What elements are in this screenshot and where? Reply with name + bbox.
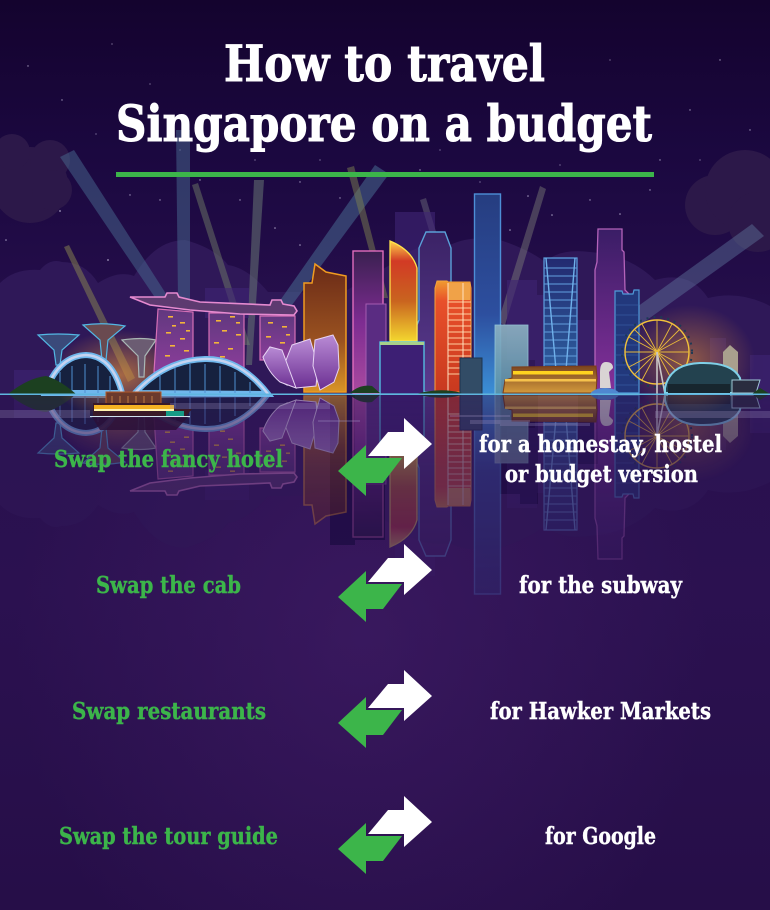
title: Singapore on a budget — [116, 94, 652, 153]
small far tower — [723, 345, 738, 394]
reflected clouds — [0, 394, 770, 550]
title: How to travel — [224, 34, 545, 93]
row 1: hotel swap — [54, 418, 722, 496]
base block — [380, 342, 424, 394]
searchlight beams — [60, 130, 764, 382]
arrows: cab — [338, 544, 432, 622]
swap from: cab: Swap the cab — [96, 572, 241, 599]
glows — [50, 330, 190, 420]
merlion — [590, 362, 620, 394]
shrubs — [350, 386, 770, 394]
gardens domes — [45, 355, 268, 394]
swap from: hotel: Swap the fancy hotel — [54, 446, 283, 473]
hatched blue tower — [544, 258, 577, 370]
arrows: restaurants — [338, 670, 432, 748]
swap from: restaurants: Swap restaurants — [72, 698, 266, 725]
swap to: google: for Google — [545, 823, 656, 850]
art science museum — [263, 335, 339, 390]
faint city — [14, 212, 770, 394]
fullerton — [503, 366, 597, 393]
swap to: subway: for the subway — [519, 572, 683, 599]
stars — [5, 43, 769, 336]
clouds — [0, 134, 770, 394]
title — [116, 34, 652, 153]
stadium — [665, 363, 760, 393]
supertrees — [38, 324, 156, 377]
arrows: tour guide — [338, 796, 432, 874]
swap from: tour guide: Swap the tour guide — [59, 823, 278, 850]
orange tower 2 — [435, 281, 471, 392]
pink tower — [353, 251, 383, 393]
small teal block — [460, 358, 482, 394]
blue tower right — [615, 290, 639, 393]
swap to: homestay: for a homestay, hostel — [479, 431, 722, 458]
purple stepped tower — [595, 229, 632, 392]
water ripples — [0, 403, 770, 426]
row 3: restaurant swap — [72, 670, 711, 748]
waterline — [0, 394, 770, 395]
arrows: hotel — [338, 418, 432, 496]
skyline — [8, 194, 770, 420]
reflection — [10, 395, 770, 595]
left shrub — [8, 376, 76, 394]
tall blue tower — [474, 194, 500, 394]
boat — [90, 392, 192, 430]
swap to: homestay — [479, 431, 722, 488]
row 4: tour guide swap — [59, 796, 656, 874]
Marina Bay Sands — [130, 293, 297, 372]
row 2: cab swap — [96, 544, 683, 622]
title underline — [116, 172, 654, 177]
ferris wheel — [622, 317, 692, 394]
curved yellow tower — [390, 241, 417, 341]
inner pink tower — [366, 304, 386, 392]
light blue tower — [495, 325, 528, 394]
blue outline tower — [417, 232, 451, 392]
orange tower — [304, 264, 346, 392]
swap to: homestay: or budget version — [505, 461, 698, 488]
swap to: hawker markets: for Hawker Markets — [490, 698, 711, 725]
dark reflected silhouettes — [330, 394, 598, 545]
